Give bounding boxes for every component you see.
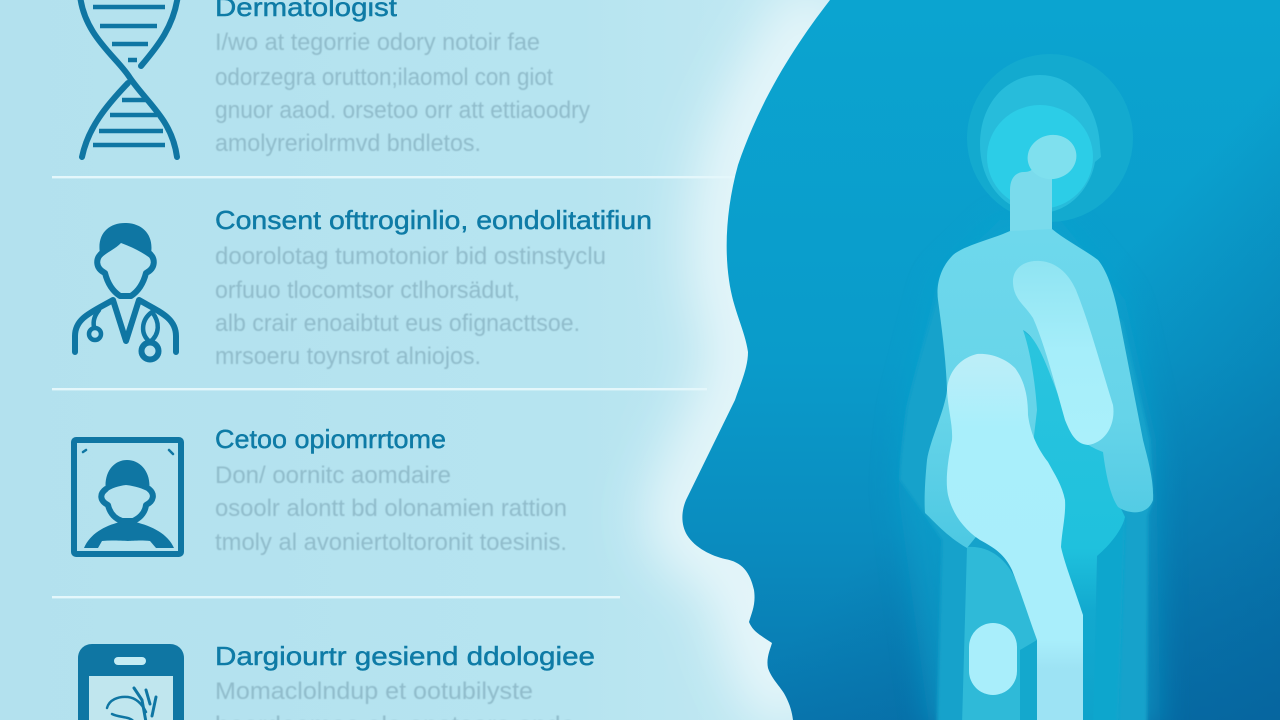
- heading: Dargiourtr gesiend ddologiee: [215, 641, 595, 671]
- figure: highlighted arm: [1013, 261, 1113, 445]
- figure: thigh dark strip: [1020, 640, 1037, 720]
- heading: Cetoo opiomrrtome: [215, 424, 446, 454]
- body text: odorzegra orutton;ilaomol con giot: [215, 64, 553, 91]
- body text: doorolotag tumotonior bid ostinstyclu: [215, 243, 606, 270]
- body text: [215, 243, 606, 370]
- figure: neck: [1010, 170, 1052, 231]
- icon: portrait frame: [74, 440, 181, 554]
- glow along face silhouette: [682, 0, 830, 720]
- icon: doctor with stethoscope: [75, 223, 176, 360]
- icon: phone with plant image: [78, 644, 184, 720]
- figure: torso and right arm: [925, 229, 1153, 548]
- figure: halo rings: [967, 54, 1133, 222]
- figure: thigh shadow layer: [962, 547, 1037, 720]
- section 2: consent: [75, 205, 652, 370]
- section 1: dermatologist: [80, 0, 590, 157]
- figure: capsule highlight: [969, 623, 1017, 695]
- figure: soft aura: [905, 401, 1168, 720]
- section 4: diagnostics: [78, 641, 595, 720]
- head fill: [660, 0, 1280, 720]
- section 3: options: [74, 424, 567, 556]
- body text: osoolr alontt bd olonamien rattion: [215, 495, 567, 522]
- figure: inner leg band right: [1094, 520, 1126, 720]
- divider: [52, 176, 742, 178]
- body text: gnuor aaod. orsetoo orr att ettiaoodry: [215, 97, 590, 124]
- body text: mrsoeru toynsrot alniojos.: [215, 343, 481, 370]
- body text: alb crair enoaibtut eus ofignacttsoe.: [215, 310, 580, 337]
- body text: orfuuo tlocomtsor ctlhorsädut,: [215, 277, 520, 304]
- body text: tmoly al avoniertoltoronit toesinis.: [215, 529, 567, 556]
- divider: [52, 596, 620, 598]
- head silhouette with body figure: [660, 0, 1280, 720]
- icon: DNA helix: [80, 0, 178, 157]
- body text: I/wo at tegorrie odory notoir fae: [215, 29, 540, 56]
- figure: outer body band: [900, 260, 1153, 720]
- body text: amolyreriolrmvd bndletos.: [215, 130, 481, 157]
- body text: [215, 462, 567, 556]
- figure: head blob: [1028, 134, 1076, 180]
- heading: Consent ofttroginlio, eondolitatifiun: [215, 205, 652, 235]
- body text: [215, 678, 575, 720]
- figure: highlighted leg and hip: [947, 354, 1083, 720]
- body text: Don/ oornitc aomdaire: [215, 462, 451, 489]
- figure: lower body layer: [1023, 330, 1125, 608]
- body text: [215, 29, 590, 157]
- divider: [52, 388, 707, 390]
- body text: Momaclolndup et ootubilyste: [215, 678, 533, 705]
